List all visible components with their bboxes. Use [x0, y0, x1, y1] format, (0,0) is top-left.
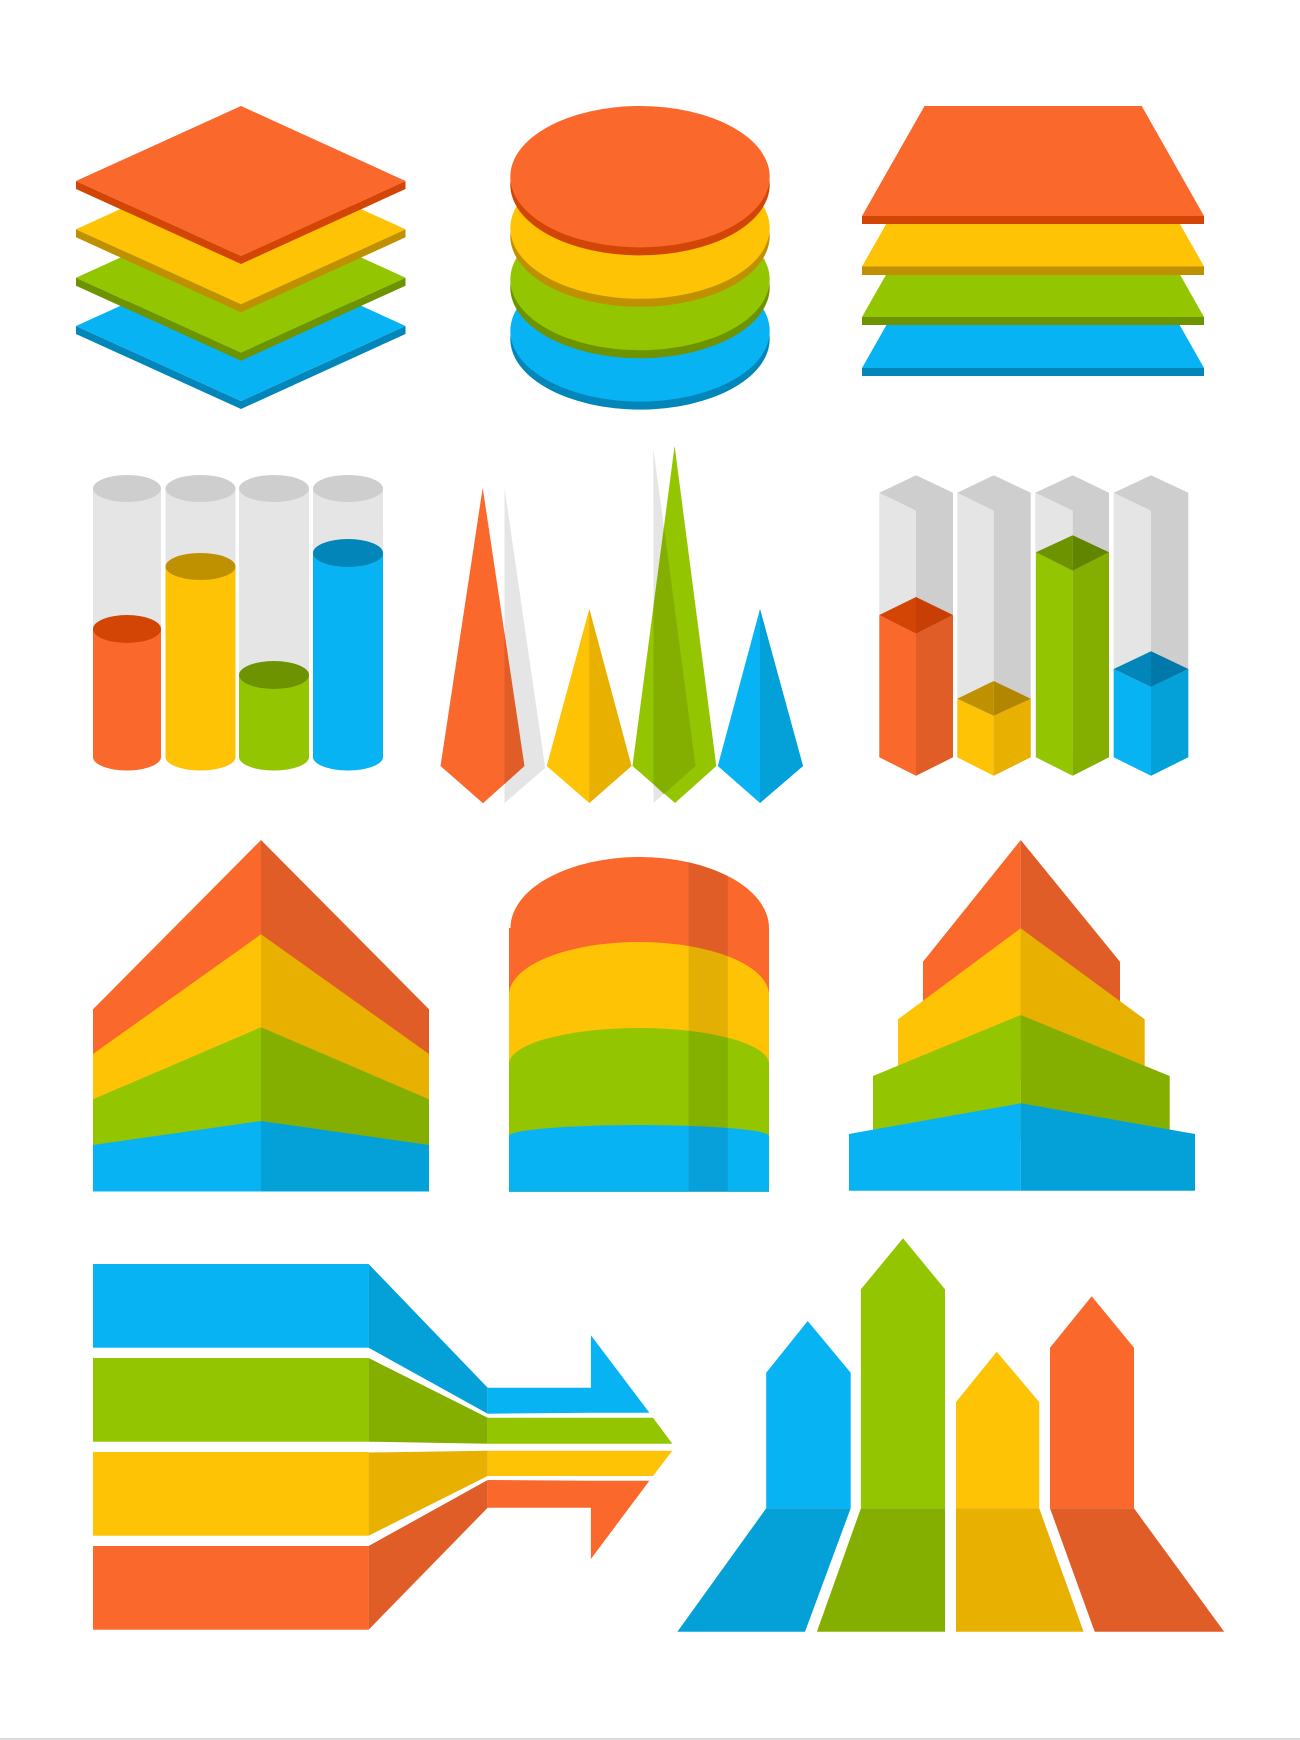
- layer: orange trapezoid: [862, 106, 1204, 224]
- bar: orange cylinder: [93, 475, 161, 770]
- layer: yellow trapezoid: [862, 156, 1204, 275]
- layer: green chevron: [93, 1027, 429, 1150]
- panel: cylinder bar chart: [93, 475, 383, 770]
- tier: green: [873, 1015, 1170, 1140]
- stream: orange: [93, 1480, 649, 1630]
- band: green: [509, 1028, 769, 1192]
- layer: orange chevron: [93, 840, 429, 1060]
- layer: green diamond: [76, 203, 406, 361]
- bottom edge strip: [0, 1738, 1300, 1740]
- panel: merging arrow: [93, 1264, 672, 1630]
- layer: blue disc: [510, 260, 770, 410]
- panel: isometric stacked diamond layers: [76, 106, 406, 409]
- panel: isometric bar chart: [879, 475, 1188, 776]
- layer: blue trapezoid: [862, 258, 1204, 376]
- bar: green block: [1035, 475, 1109, 776]
- stream: yellow: [93, 1451, 672, 1536]
- arrow: orange: [1050, 1296, 1224, 1632]
- bar: blue block: [1114, 475, 1188, 776]
- panel: stacked discs: [510, 106, 770, 410]
- tier: yellow: [898, 928, 1145, 1080]
- bar: blue cylinder: [313, 475, 383, 770]
- tier: orange: [923, 840, 1120, 1040]
- tier: blue: [849, 1103, 1195, 1191]
- layer: blue chevron: [93, 1121, 429, 1192]
- panel: layered chevron house: [93, 840, 429, 1192]
- panel: banded dome cylinder: [509, 850, 769, 1192]
- layer: blue diamond: [76, 251, 406, 409]
- spike: green with grey shadow: [632, 446, 716, 803]
- arrow: yellow: [956, 1352, 1084, 1632]
- band: orange dome: [509, 857, 769, 1192]
- panel: perspective arrows: [677, 1238, 1224, 1632]
- bar: yellow cylinder: [166, 475, 236, 770]
- layer: yellow chevron: [93, 934, 429, 1105]
- spike: yellow: [547, 609, 632, 803]
- bar: green cylinder: [239, 475, 309, 770]
- stream: blue: [93, 1264, 649, 1414]
- bar: yellow block: [957, 475, 1031, 776]
- band: blue: [509, 1125, 769, 1192]
- layer: orange disc: [510, 106, 770, 255]
- layer: orange diamond: [76, 106, 406, 264]
- panel: stepped pyramid: [849, 840, 1195, 1191]
- stream: green: [93, 1358, 672, 1444]
- layer: yellow diamond: [76, 154, 406, 312]
- panel: spike chart: [440, 446, 803, 803]
- vertical shading strip: [689, 850, 728, 1191]
- layer: green disc: [510, 209, 770, 358]
- panel: stacked trapezoid layers: [862, 106, 1204, 376]
- spike: orange with grey shadow: [440, 488, 545, 803]
- band: yellow: [509, 942, 769, 1192]
- layer: green trapezoid: [862, 207, 1204, 325]
- arrow: blue: [677, 1321, 851, 1632]
- layer: yellow disc: [510, 157, 770, 307]
- spike: blue: [718, 609, 803, 803]
- bar: orange block: [879, 475, 953, 776]
- arrow: green: [817, 1238, 945, 1632]
